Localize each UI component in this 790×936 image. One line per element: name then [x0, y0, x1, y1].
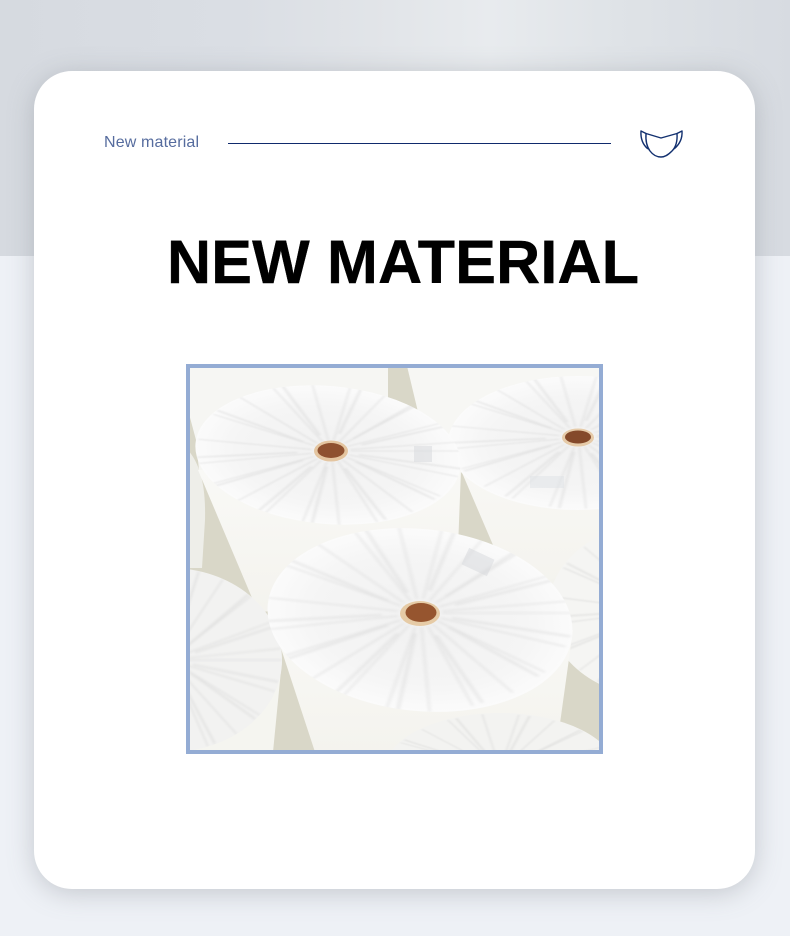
photo scene [190, 368, 599, 750]
background band [0, 0, 790, 256]
icon: face mask [640, 130, 683, 158]
back rolls top [190, 368, 388, 470]
section label: New material [104, 134, 199, 151]
roll: left middle [190, 452, 205, 568]
roll: right middle [556, 548, 599, 684]
roll: bottom [402, 715, 599, 750]
roll: upper centre [195, 395, 461, 612]
roll: top right [460, 384, 599, 582]
roll: lower left [190, 570, 282, 750]
photo: rolls of nonwoven material [186, 364, 603, 754]
title: NEW MATERIAL [167, 228, 639, 296]
photo frame [186, 364, 603, 754]
roll: front centre [268, 528, 572, 750]
panel: white card [34, 71, 755, 889]
